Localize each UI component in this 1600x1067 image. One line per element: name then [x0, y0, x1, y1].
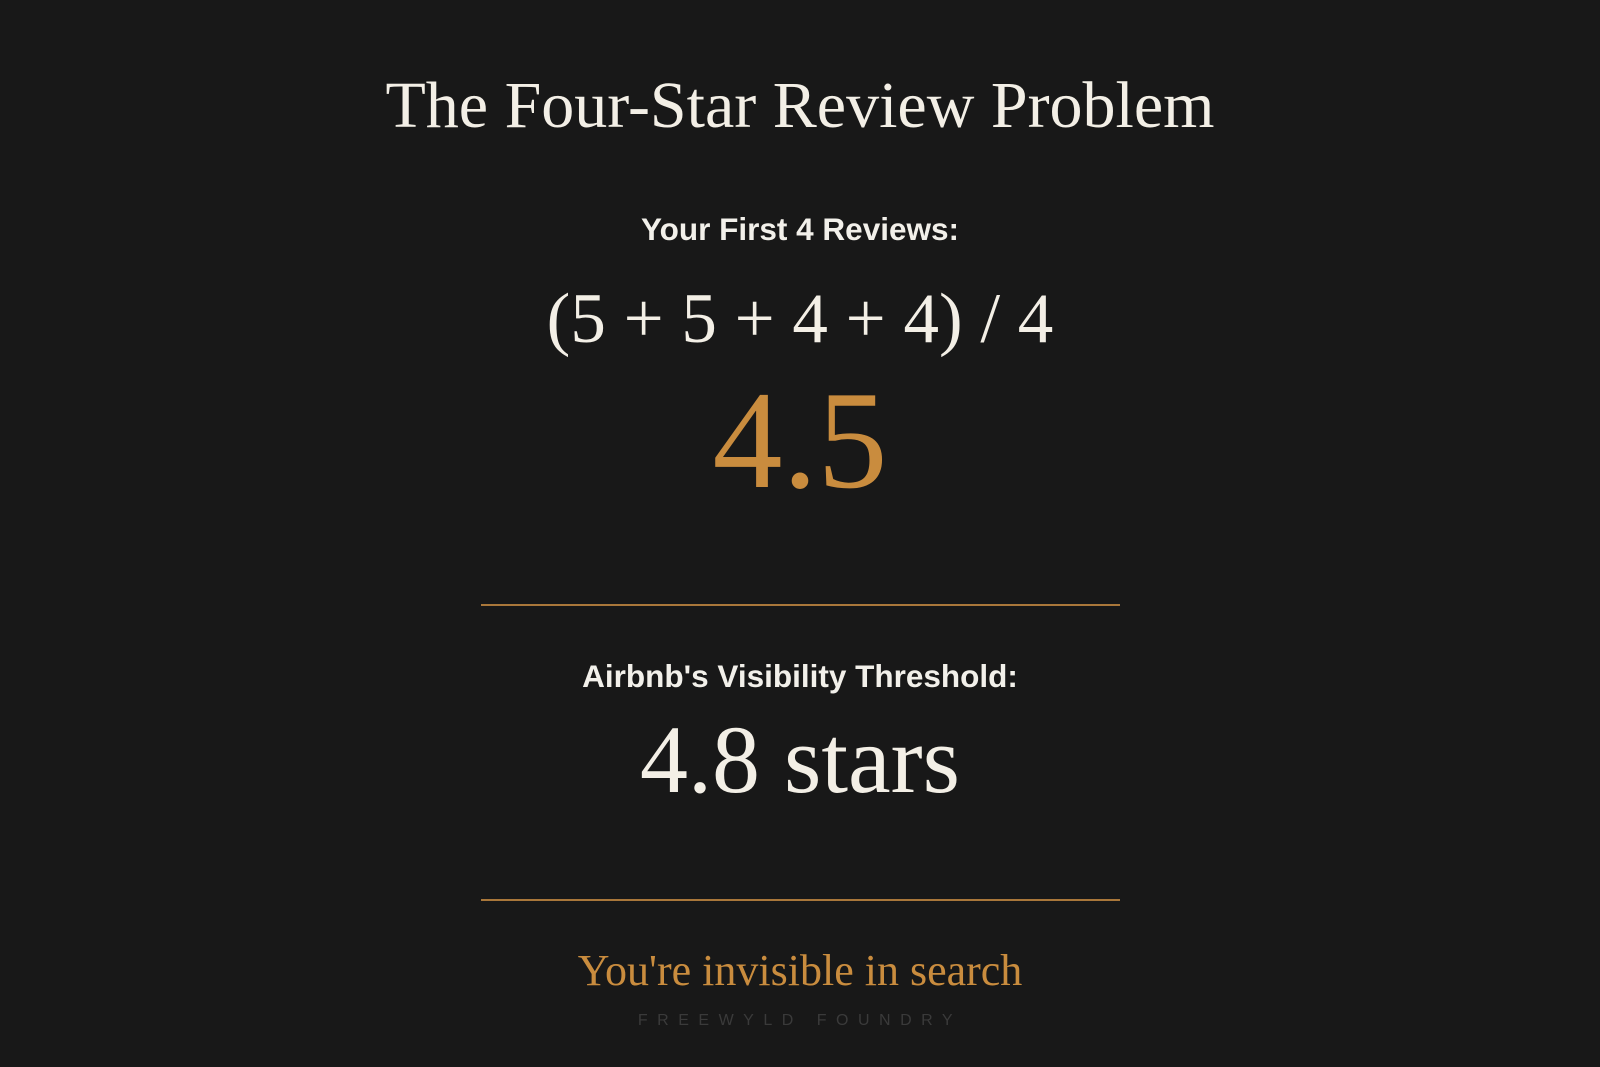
title: The Four-Star Review Problem — [385, 69, 1215, 142]
label: threshold: Airbnb's Visibility Threshold: — [582, 658, 1018, 694]
result value: 4.5 — [712, 363, 888, 518]
label: first reviews: Your First 4 Reviews: — [641, 211, 959, 247]
threshold value: 4.8 stars — [640, 706, 960, 813]
formula: (5 + 5 + 4 + 4) / 4 — [547, 280, 1053, 358]
footer brand: FREEWYLD FOUNDRY — [638, 1012, 962, 1029]
conclusion: You're invisible in search — [578, 946, 1022, 995]
